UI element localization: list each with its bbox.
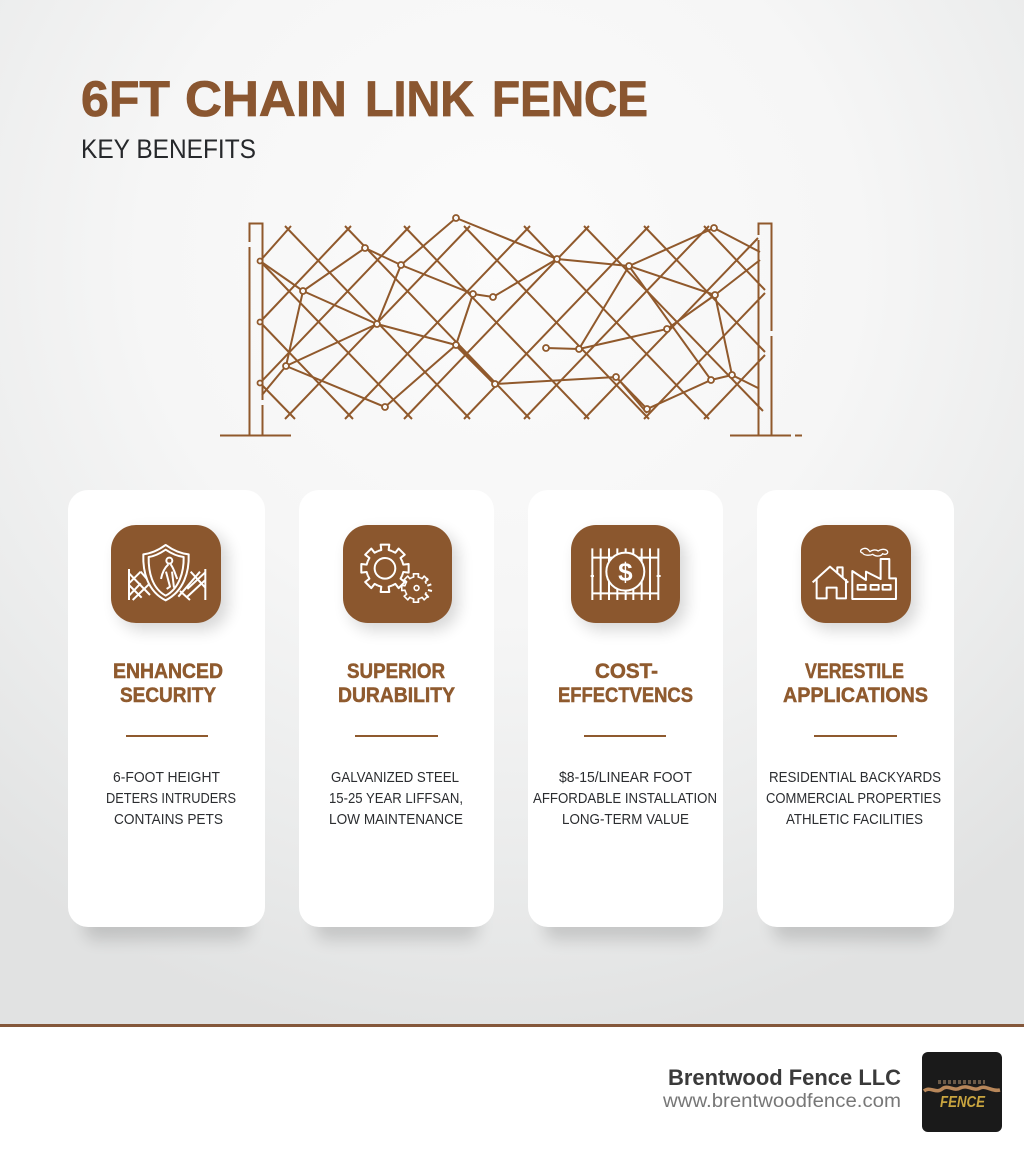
heading [113, 660, 223, 707]
description [533, 769, 717, 828]
logo [922, 1052, 1002, 1132]
heading: COST- [595, 660, 658, 683]
wire nodes [258, 215, 735, 412]
description: 6-FOOT HEIGHT [113, 769, 220, 786]
logo: FENCE [940, 1094, 986, 1111]
heading: ENHANCED [113, 660, 223, 683]
website: www.brentwoodfence.com [662, 1091, 901, 1112]
heading: SUPERIOR [347, 660, 445, 683]
description: LOW MAINTENANCE [329, 811, 463, 828]
icon: gears [343, 525, 458, 630]
heading [783, 660, 928, 707]
heading: APPLICATIONS [783, 684, 928, 707]
description: 15-25 YEAR LIFFSAN, [329, 790, 463, 807]
icon: fence with dollar coin: $ [618, 557, 633, 587]
description: AFFORDABLE INSTALLATION [533, 790, 717, 807]
icon: fence with dollar coin [571, 525, 686, 630]
title: LINK [365, 71, 474, 127]
description: COMMERCIAL PROPERTIES [766, 790, 941, 807]
footer [0, 1024, 1024, 1154]
subtitle: KEY BENEFITS [81, 134, 256, 164]
description: ATHLETIC FACILITIES [786, 811, 923, 828]
icon: house and factory [801, 525, 917, 630]
heading [338, 660, 455, 707]
description: CONTAINS PETS [114, 811, 223, 828]
panel: superior durability [299, 490, 494, 940]
title: CHAIN [185, 71, 347, 127]
heading: DURABILITY [338, 684, 455, 707]
description: GALVANIZED STEEL [331, 769, 459, 786]
illustration: chain link fence [220, 215, 802, 436]
panel: enhanced security [68, 490, 265, 940]
title: FENCE [492, 71, 648, 127]
description: $8-15/LINEAR FOOT [559, 769, 692, 786]
description [106, 769, 236, 828]
title: 6FT [81, 71, 170, 127]
description [766, 769, 941, 828]
right post [730, 224, 802, 436]
company name: Brentwood Fence LLC [668, 1065, 901, 1090]
description [329, 769, 463, 828]
panel: versatile applications [757, 490, 954, 940]
title [81, 71, 648, 127]
description: RESIDENTIAL BACKYARDS [769, 769, 941, 786]
irregular wire links [260, 218, 760, 413]
description: DETERS INTRUDERS [106, 790, 236, 807]
left post [220, 224, 291, 436]
heading: VERESTILE [805, 660, 904, 683]
heading: EFFECTVENCS [558, 684, 693, 707]
heading [558, 660, 693, 707]
heading: SECURITY [120, 684, 216, 707]
panel: cost-effectiveness [528, 490, 723, 940]
description: LONG-TERM VALUE [562, 811, 689, 828]
fence lattice [260, 226, 765, 419]
icon: shield and fence [111, 525, 228, 630]
